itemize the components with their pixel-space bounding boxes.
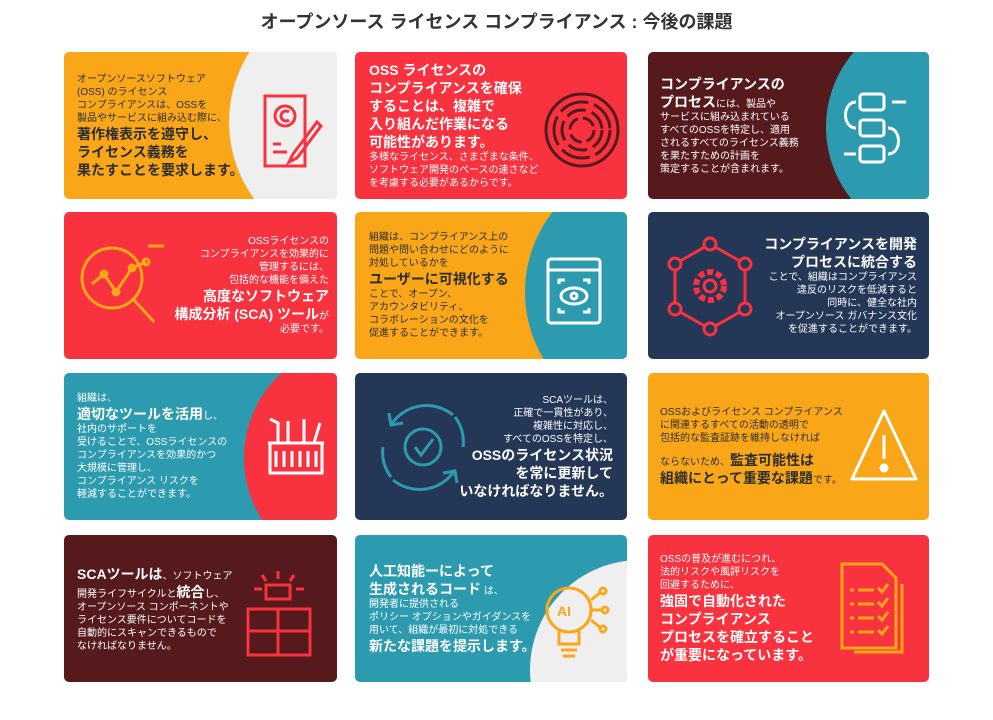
icon: AI bulb: AI bbox=[557, 603, 571, 619]
text: card 7: 受けることで、OSSライセンスの bbox=[77, 437, 227, 448]
text: card 2: ソフトウェア開発のペースの速さなど bbox=[369, 165, 538, 176]
panel: card 11 bbox=[355, 535, 627, 682]
text: card 6: オープンソース ガバナンス文化 bbox=[776, 311, 917, 322]
text: card 1: コンプライアンスは、OSSを bbox=[77, 100, 207, 110]
text: card 11: 生成されるコード は、 bbox=[369, 581, 504, 597]
text: card 11: ポリシー オプションやガイダンスを bbox=[369, 612, 531, 623]
text: card 4: コンプライアンスを効果的に bbox=[200, 249, 329, 260]
text: card 5: 促進することができます。 bbox=[369, 328, 488, 339]
text: card 3 bbox=[660, 76, 799, 175]
text: card 1: (OSS) のライセンス bbox=[77, 86, 167, 98]
text: card 5: 問題や問い合わせにどのように bbox=[369, 245, 509, 256]
text: card 4 bbox=[174, 236, 329, 335]
text: card 7: 大規模に管理し、 bbox=[77, 463, 157, 474]
icon: maze bbox=[544, 92, 620, 168]
icon: process flow bbox=[844, 92, 906, 164]
panel: card 9 bbox=[648, 373, 929, 520]
text: card 7: 適切なツールを活用し、 bbox=[77, 406, 223, 422]
text: card 11: 新たな課題を提示します。 bbox=[369, 638, 536, 654]
text: card 7: コンプライアンスを効果的かつ bbox=[77, 450, 216, 461]
text: card 6: を促進することができます。 bbox=[788, 324, 917, 335]
text: card 1: 果たすことを要求します。 bbox=[77, 162, 244, 178]
text: card 10: なければなりません。 bbox=[77, 640, 177, 652]
text: card 2: を考慮する必要があるからです。 bbox=[369, 178, 518, 189]
text: card 4: 高度なソフトウェア bbox=[203, 288, 329, 304]
text: card 9: OSSおよびライセンス コンプライアンス bbox=[660, 407, 843, 418]
text: card 11: 用いて、組織が最初に対処できる bbox=[369, 625, 518, 636]
text: card 12: が重要になっています。 bbox=[660, 647, 812, 663]
text: card 8: を常に更新して bbox=[515, 464, 613, 480]
icon: AI bulb bbox=[546, 586, 610, 658]
text: card 7: 軽減することができます。 bbox=[77, 489, 196, 500]
text: card 3: すべてのOSSを特定し、適用 bbox=[660, 125, 790, 136]
text: card 9 bbox=[660, 406, 843, 486]
text: card 10: 開発ライフサイクルと統合し、 bbox=[77, 584, 224, 600]
text: card 12: プロセスを確立すること bbox=[660, 629, 814, 645]
panel: card 2 bbox=[355, 52, 627, 199]
text: card 2: することは、複雑で bbox=[369, 98, 495, 114]
text: card 12 bbox=[660, 553, 814, 663]
text: card 3: されるすべてのライセンス義務 bbox=[660, 138, 799, 149]
text: card 1 bbox=[77, 74, 244, 178]
panel: card 7 bbox=[64, 373, 337, 520]
text: card 10: ライセンス要件についてコードを bbox=[77, 614, 226, 626]
text: card 2: 多様なライセンス、さまざまな条件、 bbox=[369, 152, 539, 163]
text: card 10: 自動的にスキャンできるもので bbox=[77, 628, 217, 638]
panel: card 8 bbox=[355, 373, 627, 520]
panel: card 12 bbox=[648, 535, 929, 682]
text: card 5: アカウンタビリティ、 bbox=[369, 302, 468, 313]
text: card 11 bbox=[369, 563, 536, 654]
text: card 2: OSS ライセンスの bbox=[369, 62, 486, 78]
text: card 6: コンプライアンスを開発 bbox=[764, 236, 917, 252]
text: card 5: 対処しているかを ことで、オープン、 bbox=[369, 258, 457, 300]
panel: card 3 bbox=[648, 52, 929, 199]
text: card 8: OSSのライセンス状況 bbox=[472, 446, 613, 462]
text: card 1: 著作権表示を遵守し、 bbox=[77, 126, 217, 142]
text: card 9: 包括的な監査証跡を維持しなければ bbox=[660, 433, 820, 444]
text: card 12: 回避するために、 bbox=[660, 580, 740, 591]
panel: card 10 bbox=[64, 535, 337, 682]
text: card 4: 包括的な機能を備えた 必要です。 bbox=[229, 275, 329, 335]
text: card 7 bbox=[77, 392, 227, 500]
text: card 8: 正確で一貫性があり、 bbox=[513, 408, 613, 418]
icon: toolbox bbox=[268, 418, 324, 474]
icon: copyright document bbox=[264, 94, 323, 168]
text: card 1: オープンソースソフトウェア bbox=[77, 74, 206, 84]
icon: checklist bbox=[840, 562, 904, 654]
text: card 2: 入り組んだ作業になる bbox=[369, 116, 509, 132]
text: card 8: いなければなりません。 bbox=[459, 482, 613, 498]
text: card 3: 策定することが含まれます。 bbox=[660, 164, 789, 175]
text: card 3: コンプライアンスの bbox=[660, 76, 785, 92]
text: card 11: 開発者に提供される bbox=[369, 599, 459, 610]
text: card 3: プロセスには、製品や bbox=[660, 94, 776, 110]
title: オープンソース ライセンス コンプライアンス : 今後の課題 bbox=[260, 12, 733, 32]
text: card 4: OSSライセンスの bbox=[248, 236, 329, 247]
text: card 7: コンプライアンス リスクを bbox=[77, 476, 199, 487]
text: card 9: に関連するすべての活動の透明で bbox=[660, 420, 809, 431]
text: card 7: 組織は、 社内のサポートを bbox=[77, 393, 157, 435]
text: card 2: 可能性があります。 bbox=[369, 134, 494, 150]
icon: refresh check bbox=[381, 404, 465, 491]
text: card 3: を果たすための計画を bbox=[660, 151, 760, 162]
panel: card 1 bbox=[64, 52, 337, 199]
text: card 5: 組織は、コンプライアンス上の bbox=[369, 232, 508, 243]
text: card 1: ライセンス義務を bbox=[77, 144, 189, 160]
text: card 6: 同時に、健全な社内 bbox=[827, 298, 917, 309]
text: card 5: ユーザーに可視化する bbox=[369, 271, 509, 287]
text: card 11: 人工知能ーによって bbox=[369, 563, 494, 579]
icon: puzzle bbox=[246, 571, 312, 656]
text: card 6: 違反のリスクを低減すると bbox=[797, 285, 917, 296]
text: card 8: SCAツールは、 bbox=[542, 394, 613, 406]
icon: gear network bbox=[668, 236, 752, 336]
text: card 12: 法的リスクや風評リスクを bbox=[660, 567, 780, 578]
panel: card 6 bbox=[648, 212, 929, 359]
icon: magnifier chart bbox=[80, 244, 164, 323]
text: card 2 bbox=[369, 62, 539, 189]
panel: card 4 bbox=[64, 212, 337, 359]
text: card 5 bbox=[369, 231, 509, 339]
text: card 12: コンプライアンス bbox=[660, 611, 771, 627]
text: card 4: 構成分析 (SCA) ツールが bbox=[174, 306, 329, 322]
text: card 8: 複雑性に対応し、 bbox=[533, 420, 613, 432]
icon: warning bbox=[850, 410, 918, 480]
text: card 12: 強固で自動化された bbox=[660, 593, 786, 609]
text: card 10 bbox=[77, 566, 233, 652]
text: card 6: ことで、組織はコンプライアンス bbox=[769, 272, 917, 283]
icon: screen eye bbox=[546, 258, 602, 324]
panel: card 5 bbox=[355, 212, 627, 359]
text: card 9: 組織にとって重要な課題です。 bbox=[660, 470, 842, 486]
text: card 9: ならないため、監査可能性は bbox=[660, 452, 814, 468]
text: card 6 bbox=[764, 236, 917, 335]
text: card 12: OSSの普及が進むにつれ、 bbox=[660, 554, 781, 565]
text: card 5: コラボレーションの文化を bbox=[369, 315, 489, 326]
text: card 6: プロセスに統合する bbox=[791, 254, 917, 270]
text: card 10: オープンソース コンポーネントや bbox=[77, 602, 229, 612]
text: card 3: サービスに組み込まれている bbox=[660, 112, 790, 123]
text: card 2: コンプライアンスを確保 bbox=[369, 80, 522, 96]
text: card 8: すべてのOSSを特定し、 bbox=[503, 434, 613, 444]
text: card 8 bbox=[459, 394, 613, 498]
text: card 4: 管理するには、 bbox=[259, 262, 329, 273]
text: card 1: 製品やサービスに組み込む際に、 bbox=[77, 112, 227, 124]
text: card 10: SCAツールは、ソフトウェア bbox=[77, 566, 233, 582]
